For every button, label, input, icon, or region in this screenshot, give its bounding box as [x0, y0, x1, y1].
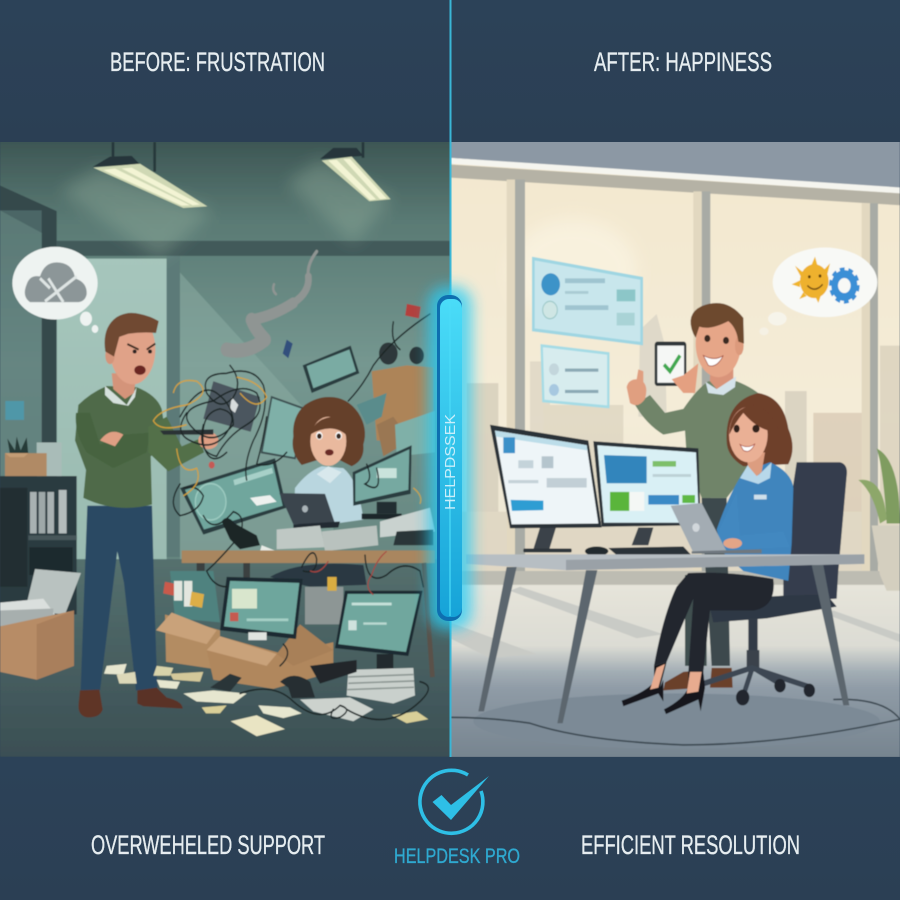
monitor top right — [303, 346, 359, 393]
bottom footer band — [0, 757, 900, 900]
left monitor — [490, 425, 602, 528]
dual monitors — [490, 425, 700, 552]
devices on top of box — [379, 342, 398, 365]
logo: check mark in circle — [420, 770, 489, 833]
open boxes on floor — [156, 613, 333, 689]
floating support panel small — [542, 346, 608, 407]
fringe — [729, 405, 778, 435]
office floor — [450, 585, 900, 759]
eyes — [704, 335, 710, 342]
monitor behind woman — [262, 397, 305, 458]
right monitor stand — [632, 527, 653, 545]
thought bubble with broken cloud — [12, 247, 98, 333]
jeans — [81, 506, 157, 690]
helpdesk glowing bar — [428, 286, 472, 630]
paper stacks on desk — [250, 495, 435, 562]
distressed woman — [293, 397, 365, 529]
mouse and keyboard — [585, 546, 691, 556]
box and plant on cabinet — [5, 437, 62, 476]
collar — [740, 462, 772, 484]
teal folder with flags — [163, 571, 220, 622]
office floor — [0, 559, 450, 757]
ceiling — [450, 140, 900, 191]
front left monitor — [220, 577, 303, 640]
smile — [703, 355, 723, 366]
face — [729, 407, 768, 462]
trousers — [654, 573, 774, 672]
potted plant — [858, 448, 900, 591]
center divider line — [450, 0, 452, 757]
tangled cables — [173, 314, 430, 720]
mouth — [325, 449, 334, 456]
hair — [691, 303, 744, 344]
hair — [727, 393, 792, 466]
shoes — [78, 690, 103, 717]
ear — [104, 352, 114, 365]
laptop on desk — [671, 503, 762, 554]
shoes — [663, 670, 703, 690]
trousers — [702, 498, 730, 666]
black devices on floor — [210, 660, 357, 698]
phone with green check — [655, 342, 698, 393]
office wall background — [0, 140, 450, 587]
happy man — [627, 303, 767, 690]
tablet — [357, 393, 387, 425]
heading: after: AFTER: HAPPINESS — [594, 47, 772, 77]
head — [696, 310, 741, 377]
caption: efficient resolution: EFFICIENT RESOLUTION — [581, 830, 800, 860]
ceiling light left — [60, 142, 213, 259]
happy woman — [622, 393, 793, 714]
overflowing cardboard box — [0, 569, 81, 680]
wrench — [40, 276, 77, 302]
shouting mouth — [134, 365, 146, 375]
badge — [754, 495, 767, 499]
frustrated man — [75, 313, 218, 717]
sweater — [635, 381, 767, 498]
thought bubble with sun and gear — [759, 248, 877, 335]
caption: overwhelmed support: OVERWEHELED SUPPORT — [91, 830, 325, 860]
crossed hand — [100, 432, 123, 446]
window header frame — [450, 165, 900, 205]
right monitor — [593, 441, 700, 527]
smiling sun — [800, 264, 829, 298]
face — [310, 417, 346, 466]
woman's right monitor — [353, 445, 412, 519]
collar — [706, 376, 736, 395]
floating support panel large — [533, 259, 642, 344]
collar — [317, 466, 342, 483]
logo wordmark: HELPDESK PRO — [394, 845, 520, 868]
sticky note on wall — [5, 401, 24, 420]
extended hand — [198, 432, 218, 449]
monitor right edge — [395, 411, 435, 456]
eyes — [316, 432, 323, 440]
held laptop — [160, 381, 260, 435]
window mullions — [450, 180, 900, 587]
blue flying note — [283, 340, 293, 358]
smoke — [227, 252, 317, 351]
red cables — [209, 304, 421, 595]
desk — [182, 550, 435, 677]
black desk phone — [222, 518, 260, 549]
left monitor stand — [533, 527, 556, 549]
neck — [112, 373, 137, 399]
eyes — [734, 425, 740, 433]
hand — [723, 538, 742, 548]
desk — [466, 554, 864, 723]
desk legs — [478, 567, 517, 711]
smile — [740, 444, 755, 451]
dark door frame — [0, 186, 58, 443]
fringe — [310, 417, 348, 437]
before scene illustration — [0, 140, 450, 757]
ear — [735, 336, 744, 355]
hair — [293, 397, 365, 466]
paper stack behind boxes — [305, 587, 343, 624]
extended arm — [148, 417, 204, 471]
box upper right — [372, 365, 433, 441]
after scene illustration — [450, 140, 900, 759]
city skyline — [450, 314, 900, 581]
eyes and brow — [127, 344, 155, 350]
yellow cables — [153, 377, 421, 504]
bar label: HELPDSSEK — [442, 414, 459, 510]
neck — [745, 452, 765, 476]
blue gear — [835, 274, 854, 297]
cloud — [25, 262, 87, 302]
stacked back monitors — [262, 342, 435, 458]
paper stack under monitor — [347, 668, 415, 703]
sticky note yellow — [327, 577, 337, 591]
neck — [710, 365, 733, 393]
sweater — [75, 386, 167, 508]
big tilted monitor — [180, 458, 287, 535]
heading: before: BEFORE: FRUSTRATION — [110, 47, 325, 77]
floor rug — [473, 694, 880, 749]
sun rays — [792, 257, 830, 303]
blouse — [717, 462, 793, 581]
crossed arm — [76, 413, 150, 468]
thumbs up hand — [627, 369, 646, 405]
top header band — [0, 0, 900, 142]
ceiling light strip — [450, 158, 900, 193]
arm — [718, 492, 790, 549]
front right monitor — [335, 591, 423, 670]
office chair — [703, 462, 847, 705]
woman's laptop — [279, 493, 340, 529]
floor cable — [450, 699, 900, 745]
window — [57, 241, 450, 559]
ceiling light right — [287, 142, 393, 243]
leg and heel — [622, 662, 667, 706]
hair — [105, 313, 159, 357]
window view background — [450, 164, 900, 591]
shirt — [293, 466, 363, 529]
scattered papers on floor — [104, 664, 428, 736]
collar — [105, 386, 137, 406]
filing cabinet with binders — [0, 476, 77, 614]
sun haze — [510, 219, 637, 322]
sun streaks on floor — [450, 587, 900, 658]
head — [112, 332, 156, 384]
